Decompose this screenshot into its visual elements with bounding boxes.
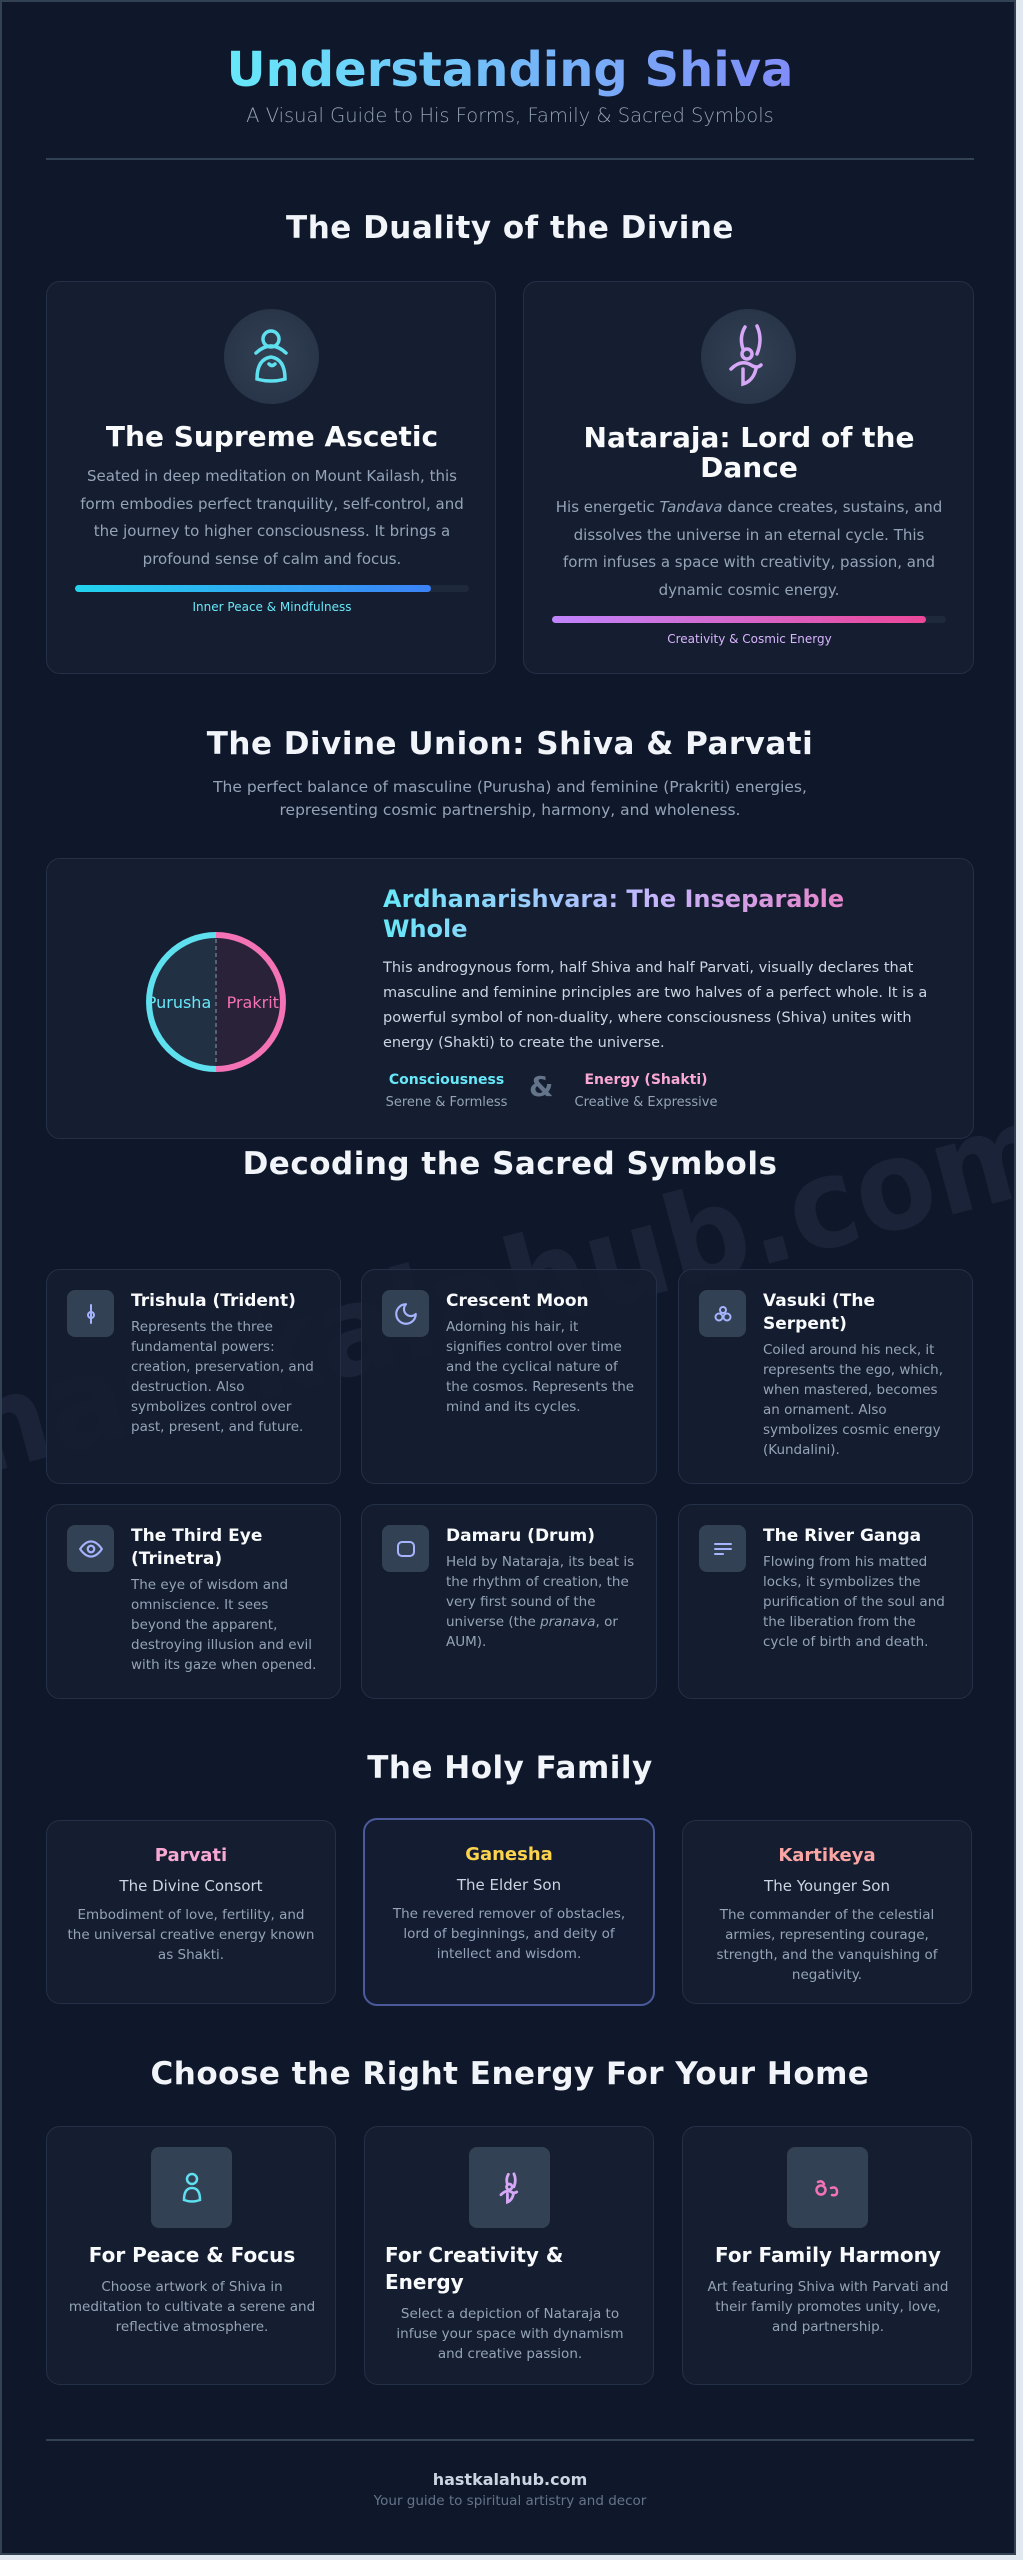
- union paragraph: This androgynous form, half Shiva and half Parvati, visually declares that masculine and feminine principles are two halves of a perfect whole. It is a powerful symbol of non-duality, where consciousness (Shiva) unites with energy (Shakti) to create the universe.: [383, 960, 927, 1051]
- heading: divine union: The Divine Union: Shiva & Parvati: [207, 726, 813, 762]
- bar label: Inner Peace & Mindfulness: [193, 600, 351, 614]
- panel: ganesha: The revered remover of obstacles, lord of beginnings, and deity of intellect and wisdom.: [393, 1906, 625, 1962]
- text: Coiled around his neck, it represents the ego, which, when mastered, becomes an ornament. Also symbolizes cosmic energy (Kundalini).: [763, 1342, 943, 1458]
- title: For Peace & Focus: [89, 2243, 295, 2267]
- subtitle: A Visual Guide to His Forms, Family & Sacred Symbols: [246, 104, 774, 127]
- consciousness label: Serene & Formless: [386, 1095, 507, 1110]
- panel: ganesha: Ganesha: [465, 1844, 553, 1865]
- panel: parvati: Embodiment of love, fertility, and the universal creative energy known as Shakti.: [68, 1907, 314, 1963]
- description: Art featuring Shiva with Parvati and their family promotes unity, love, and partnership.: [708, 2279, 948, 2335]
- heading: sacred symbols: Decoding the Sacred Symbols: [243, 1146, 777, 1182]
- text: Crescent Moon: [446, 1291, 589, 1311]
- heading: choose energy: Choose the Right Energy For Your Home: [151, 2056, 869, 2092]
- panel: kartikeya: [682, 1820, 972, 2004]
- progress bar: [552, 616, 946, 623]
- footer: [374, 2470, 646, 2509]
- text: Held by Nataraja, its beat is the rhythm of creation, the very first sound of the universe (the pranava, or AUM).: [446, 1554, 634, 1650]
- panel: supreme ascetic: [46, 281, 496, 674]
- text: [130, 1526, 316, 1673]
- consciousness label: [386, 1072, 507, 1110]
- icon: trident: [67, 1290, 114, 1337]
- description: Select a depiction of Nataraja to infuse your space with dynamism and creative passion.: [396, 2306, 624, 2362]
- panel: kartikeya: The Younger Son: [764, 1877, 890, 1895]
- panel: nataraja: [523, 281, 974, 674]
- heading: duality: The Duality of the Divine: [286, 210, 734, 246]
- icon: dancer: [469, 2147, 550, 2228]
- panel: peace & focus: [46, 2126, 336, 2385]
- icon: half circle diagram: Purusha: [147, 993, 211, 1012]
- text: [763, 1291, 943, 1458]
- text: Trishula (Trident): [131, 1291, 296, 1311]
- panel: parvati: Parvati: [155, 1845, 227, 1866]
- description: Choose artwork of Shiva in meditation to cultivate a serene and reflective atmosphere.: [69, 2279, 315, 2335]
- panel: creativity: [364, 2126, 654, 2385]
- description: His energetic Tandava dance creates, sustains, and dissolves the universe in an eternal cycle. This form infuses a space with creativity, passion, and dynamic cosmic energy.: [556, 498, 942, 598]
- icon: half circle diagram: [146, 932, 286, 1072]
- text: Represents the three fundamental powers: creation, preservation, and destruction. Also symbolizes control over past, present, and future.: [131, 1319, 314, 1435]
- icon: person: [151, 2147, 232, 2228]
- panel: damaru: [361, 1504, 657, 1699]
- panel: ardhanarishvara: [46, 858, 974, 1139]
- footer: hastkalahub.com: [433, 2470, 587, 2489]
- text: Adorning his hair, it signifies control over time and the cyclical nature of the cosmos. Represents the mind and its cycles.: [446, 1319, 634, 1415]
- panel: kartikeya: The commander of the celestial armies, representing courage, strength, and the vanquishing of negativity.: [716, 1907, 938, 1983]
- icon: eye: [67, 1525, 114, 1572]
- text: Damaru (Drum): [446, 1526, 595, 1546]
- panel: crescent moon: [361, 1269, 657, 1484]
- icon: dancer: [701, 309, 796, 404]
- card title: Nataraja: Lord of the Dance: [584, 421, 914, 484]
- title: Understanding Shiva: [227, 42, 793, 98]
- union title: Ardhanarishvara: The Inseparable Whole: [383, 885, 844, 943]
- icon: family: [787, 2147, 868, 2228]
- icon: meditating figure: [224, 309, 319, 404]
- icon: moon: [382, 1290, 429, 1337]
- panel: parvati: [46, 1820, 336, 2004]
- text: Vasuki (The Serpent): [763, 1291, 875, 1334]
- progress bar: [75, 585, 469, 592]
- panel: parvati: The Divine Consort: [119, 1877, 263, 1895]
- consciousness label: Consciousness: [389, 1072, 504, 1088]
- text: The Third Eye (Trinetra): [131, 1526, 262, 1569]
- icon: drum: [382, 1525, 429, 1572]
- text: The eye of wisdom and omniscience. It sees beyond the apparent, destroying illusion and evil with its gaze when opened.: [131, 1577, 316, 1673]
- bar label: Creativity & Cosmic Energy: [667, 632, 832, 646]
- panel: kartikeya: Kartikeya: [778, 1845, 876, 1866]
- footer: Your guide to spiritual artistry and decor: [374, 2493, 646, 2509]
- panel: ganesha: [363, 1818, 655, 2006]
- union subtitle: The perfect balance of masculine (Purusha) and feminine (Prakriti) energies, representing cosmic partnership, harmony, and wholeness.: [213, 778, 807, 819]
- panel: third eye: [46, 1504, 341, 1699]
- heading: holy family: The Holy Family: [367, 1750, 653, 1786]
- panel: trishula: [46, 1269, 341, 1484]
- icon: waves: [699, 1525, 746, 1572]
- card title: The Supreme Ascetic: [106, 420, 438, 453]
- panel: family harmony: [682, 2126, 972, 2385]
- icon: half circle diagram: Prakriti: [227, 993, 283, 1012]
- title: For Family Harmony: [715, 2243, 941, 2267]
- text: Flowing from his matted locks, it symbolizes the purification of the soul and the liberation from the cycle of birth and death.: [763, 1554, 945, 1650]
- ampersand: &: [529, 1070, 553, 1103]
- text: The River Ganga: [763, 1526, 921, 1546]
- energy label: [575, 1072, 717, 1110]
- panel: ganesha: The Elder Son: [457, 1876, 561, 1894]
- panel: vasuki: [678, 1269, 973, 1484]
- energy label: Energy (Shakti): [584, 1072, 708, 1088]
- description: Seated in deep meditation on Mount Kailash, this form embodies perfect tranquility, self-control, and the journey to higher consciousness. It brings a profound sense of calm and focus.: [80, 467, 464, 568]
- icon: serpent: [699, 1290, 746, 1337]
- title: For Creativity & Energy: [385, 2243, 563, 2294]
- panel: river ganga: [678, 1504, 973, 1699]
- energy label: Creative & Expressive: [575, 1095, 717, 1110]
